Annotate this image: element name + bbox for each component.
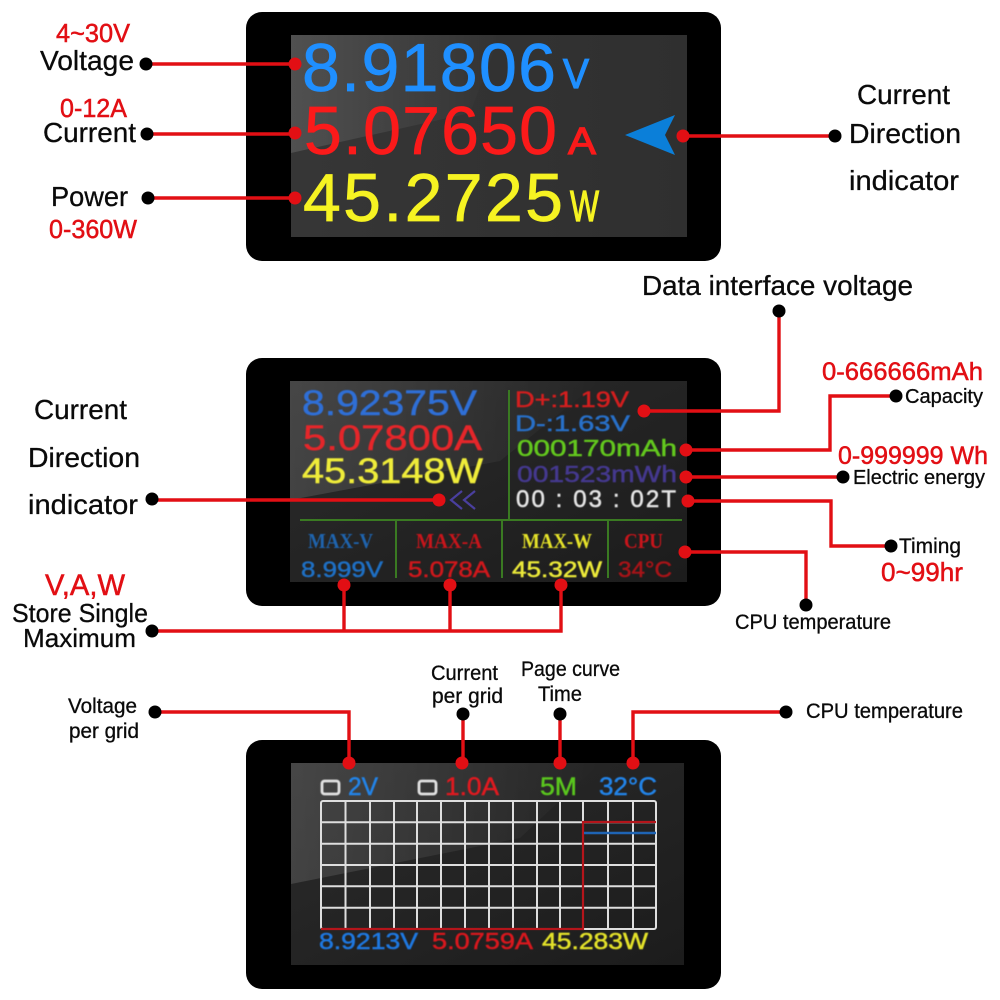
callout: capacity bbox=[680, 358, 983, 456]
callout: current direction indicator, middle: Current bbox=[34, 394, 127, 425]
voltage scale indicator: 2V bbox=[348, 773, 378, 801]
bottom readings: 8.9213V bbox=[319, 928, 419, 954]
maximum current cell bbox=[408, 529, 490, 582]
screen bbox=[291, 763, 684, 965]
voltage curve bbox=[584, 832, 656, 834]
CPU temperature cell: 34°C bbox=[618, 557, 672, 582]
bottom readings: 45.283W bbox=[542, 928, 648, 954]
callout: voltage: Voltage bbox=[40, 45, 134, 76]
power reading: 45.2725 bbox=[303, 160, 563, 236]
main readings: 8.92375V bbox=[302, 384, 478, 423]
callout: electric energy: 0-999999 Wh bbox=[838, 442, 988, 470]
callout: voltage per grid bbox=[68, 695, 356, 770]
callout: page curve time bbox=[521, 658, 620, 770]
voltage scale indicator bbox=[322, 773, 378, 801]
callout: power: Power bbox=[51, 181, 128, 212]
maximum power cell: MAX-W bbox=[522, 529, 592, 553]
callout: page curve time: Time bbox=[538, 683, 582, 706]
callout: electric energy bbox=[680, 442, 988, 489]
maximum power cell: 45.32W bbox=[512, 557, 602, 582]
data interface readings: D+:1.19V bbox=[515, 387, 629, 412]
current curve bbox=[321, 822, 656, 929]
callout: store single maximum: Store Single bbox=[12, 598, 148, 628]
callout: electric energy: Electric energy bbox=[853, 467, 985, 489]
callout: current: 0-12A bbox=[60, 93, 128, 123]
panel: detail data display bbox=[246, 358, 721, 606]
callout: current direction indicator, middle: indicator bbox=[28, 489, 138, 520]
callout: data interface voltage bbox=[638, 270, 913, 418]
energy reading: 001523mWh bbox=[517, 461, 677, 487]
bottom readings: 5.0759A bbox=[432, 928, 534, 954]
callout: timing: Timing bbox=[899, 535, 961, 558]
callout: current direction indicator, middle: Direction bbox=[28, 442, 140, 473]
maximum current cell: 5.078A bbox=[408, 557, 490, 582]
main readings: 5.07800A bbox=[303, 419, 483, 458]
CPU temperature reading: 32°C bbox=[599, 773, 657, 801]
callout: current direction indicator, top: indicator bbox=[849, 165, 959, 196]
panel: curve graph display bbox=[246, 740, 721, 989]
screen glare bbox=[290, 381, 600, 500]
callout: store single maximum: V,A,W bbox=[45, 569, 126, 602]
callout: voltage per grid: per grid bbox=[69, 720, 139, 743]
callout: store single maximum bbox=[12, 569, 568, 653]
bottom readings bbox=[319, 928, 648, 954]
data interface readings: D-:1.63V bbox=[515, 411, 630, 436]
callout: current direction indicator, top: Current bbox=[857, 79, 950, 110]
panel: main readings display bbox=[246, 12, 721, 261]
CPU temperature cell: CPU bbox=[624, 529, 663, 553]
main readings bbox=[302, 384, 483, 491]
callout: page curve time: Page curve bbox=[521, 658, 620, 681]
current scale indicator: 1.0A bbox=[445, 773, 499, 801]
callout: CPU temperature, bottom: CPU temperature bbox=[806, 700, 963, 723]
screen bbox=[291, 35, 687, 237]
callout: CPU temperature, middle bbox=[678, 546, 891, 634]
device bezel bbox=[246, 358, 721, 606]
callout: CPU temperature, bottom bbox=[626, 700, 963, 770]
capacity reading: 000170mAh bbox=[517, 435, 677, 461]
current reading: A bbox=[568, 121, 597, 163]
maximum voltage cell: MAX-V bbox=[308, 529, 373, 553]
callout: CPU temperature, middle: CPU temperature bbox=[735, 611, 891, 634]
callout: current per grid bbox=[431, 662, 503, 770]
icon: current direction arrow bbox=[625, 115, 675, 155]
maximum voltage cell: 8.999V bbox=[301, 557, 383, 582]
curve page time: 5M bbox=[540, 773, 577, 801]
callout: current per grid: per grid bbox=[432, 685, 503, 708]
callout: voltage bbox=[40, 18, 302, 76]
callout: data interface voltage: Data interface voltage bbox=[642, 270, 913, 301]
current reading: 5.07650 bbox=[304, 93, 557, 169]
callout: store single maximum: Maximum bbox=[23, 623, 136, 653]
callout: power: 0-360W bbox=[49, 214, 137, 244]
screen glare bbox=[291, 763, 600, 884]
callout: current per grid: Current bbox=[431, 662, 498, 685]
device bezel bbox=[246, 12, 721, 261]
callout: power bbox=[49, 181, 302, 244]
voltage reading: 8.91806 bbox=[302, 30, 556, 106]
callout: current direction indicator, middle bbox=[28, 394, 446, 520]
callout: current: Current bbox=[43, 117, 136, 148]
power reading: W bbox=[570, 182, 599, 231]
callout: timing: 0~99hr bbox=[881, 557, 963, 587]
data interface readings bbox=[515, 387, 630, 436]
voltage reading: V bbox=[563, 50, 589, 97]
maximum voltage cell bbox=[301, 529, 383, 582]
device bezel bbox=[246, 740, 721, 989]
maximum current cell: MAX-A bbox=[416, 529, 483, 553]
current scale indicator bbox=[419, 773, 499, 801]
screen glare bbox=[291, 35, 500, 153]
callout: voltage: 4~30V bbox=[56, 18, 131, 48]
callout: capacity: Capacity bbox=[905, 386, 983, 408]
icon: direction chevrons bbox=[451, 491, 475, 509]
callout: current direction indicator, top bbox=[676, 79, 961, 196]
timer reading: 00 : 03 : 02T bbox=[516, 486, 676, 513]
screen bbox=[290, 381, 687, 582]
chart grid bbox=[321, 801, 656, 929]
callout: voltage per grid: Voltage bbox=[68, 695, 137, 718]
callout: current direction indicator, top: Direction bbox=[849, 118, 961, 149]
maximum power cell bbox=[512, 529, 602, 582]
divider lines bbox=[300, 390, 682, 578]
callout: current bbox=[43, 93, 302, 148]
CPU temperature cell bbox=[618, 529, 672, 582]
callout: capacity: 0-666666mAh bbox=[822, 358, 983, 386]
callout: timing bbox=[682, 494, 963, 587]
main readings: 45.3148W bbox=[302, 452, 483, 491]
